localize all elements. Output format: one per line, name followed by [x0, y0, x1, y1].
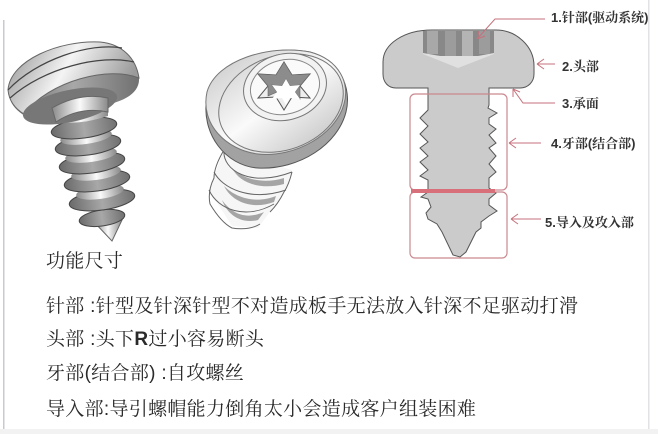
label 3: 3.承面 — [562, 96, 599, 111]
heading: 功能尺寸 — [46, 251, 123, 272]
diagram: screw cross-section — [383, 30, 534, 257]
red divider band — [411, 189, 495, 193]
text: lead-in: 导入部:导引螺帽能力倒角太小会造成客户组装困难 — [46, 399, 476, 420]
arrow: drive recess — [477, 19, 545, 39]
label 4: 4.牙部(结合部) — [551, 136, 636, 151]
arrow: bearing surface — [513, 89, 555, 103]
label 1: 1.针部(驱动系统) — [551, 10, 649, 25]
icon: right screw with torx recess — [205, 37, 357, 229]
label 2: 2.头部 — [562, 59, 599, 74]
arrow: lead-in — [511, 214, 541, 224]
arrow: head — [537, 59, 555, 69]
arrow: thread — [509, 138, 541, 148]
icon: left screw side view — [8, 42, 139, 241]
callout box: thread section — [410, 94, 507, 190]
callout box: lead-in section — [410, 192, 507, 258]
text: head: 头部 :头下R过小容易断头 — [46, 329, 264, 350]
label 5: 5.导入及攻入部 — [545, 215, 634, 230]
text: drive recess: 针部 :针型及针深针型不对造成板手无法放入针深不足驱动打滑 — [46, 296, 578, 317]
text: thread: 牙部(结合部) :自攻螺丝 — [46, 363, 244, 384]
